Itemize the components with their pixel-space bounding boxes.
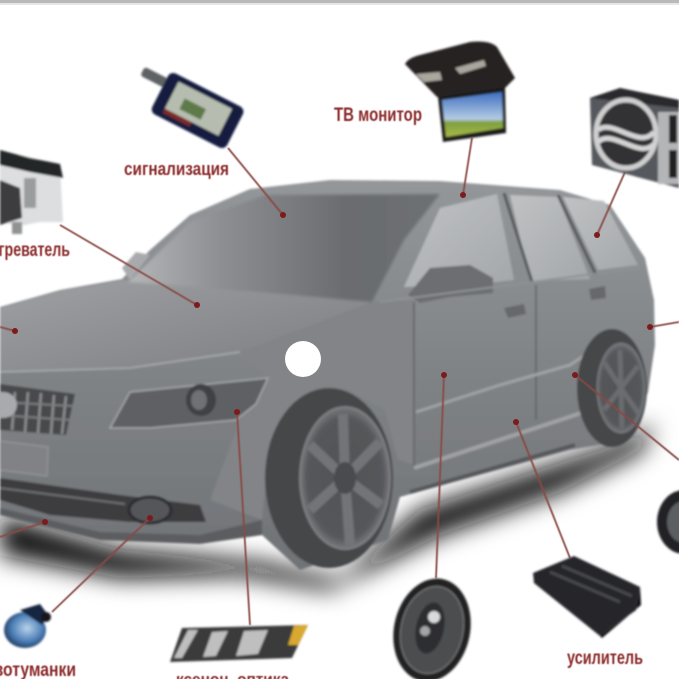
label: TV monitor: ТВ монитор xyxy=(334,105,422,126)
rear wheel xyxy=(577,329,647,447)
icon: alarm key fob xyxy=(127,60,245,150)
front door window xyxy=(404,194,514,287)
license plate xyxy=(0,441,48,476)
hood xyxy=(0,280,372,372)
icon: heater xyxy=(0,150,63,234)
white marker xyxy=(285,341,321,377)
door panel lines xyxy=(0,193,640,492)
label: alarm: сигнализация xyxy=(124,159,229,179)
lower bumper xyxy=(0,508,262,544)
icon: amplifier xyxy=(533,556,641,638)
icon: TV monitor xyxy=(405,42,515,142)
lower intake xyxy=(0,478,206,522)
connector dots xyxy=(12,192,653,525)
side mirror xyxy=(408,265,493,303)
connector lines xyxy=(0,138,679,625)
car xyxy=(0,180,655,570)
door handles xyxy=(504,304,526,318)
icon: subwoofer box xyxy=(590,88,679,188)
headlight xyxy=(110,378,268,428)
car body xyxy=(0,180,655,570)
quarter window xyxy=(563,197,638,270)
ground shadow xyxy=(0,425,655,590)
icon: xenon logo xyxy=(170,625,308,662)
label: amplifier: усилитель xyxy=(567,648,643,669)
windshield xyxy=(128,194,440,302)
rear door window xyxy=(510,195,590,281)
fender xyxy=(210,300,415,520)
grille xyxy=(0,384,75,435)
icon: right-edge speaker xyxy=(657,490,679,554)
fog lamp socket xyxy=(129,497,171,523)
icon: fog lamp xyxy=(4,604,51,648)
icon: speaker xyxy=(384,571,480,679)
front wheel xyxy=(265,388,393,568)
left mirror xyxy=(122,252,150,280)
